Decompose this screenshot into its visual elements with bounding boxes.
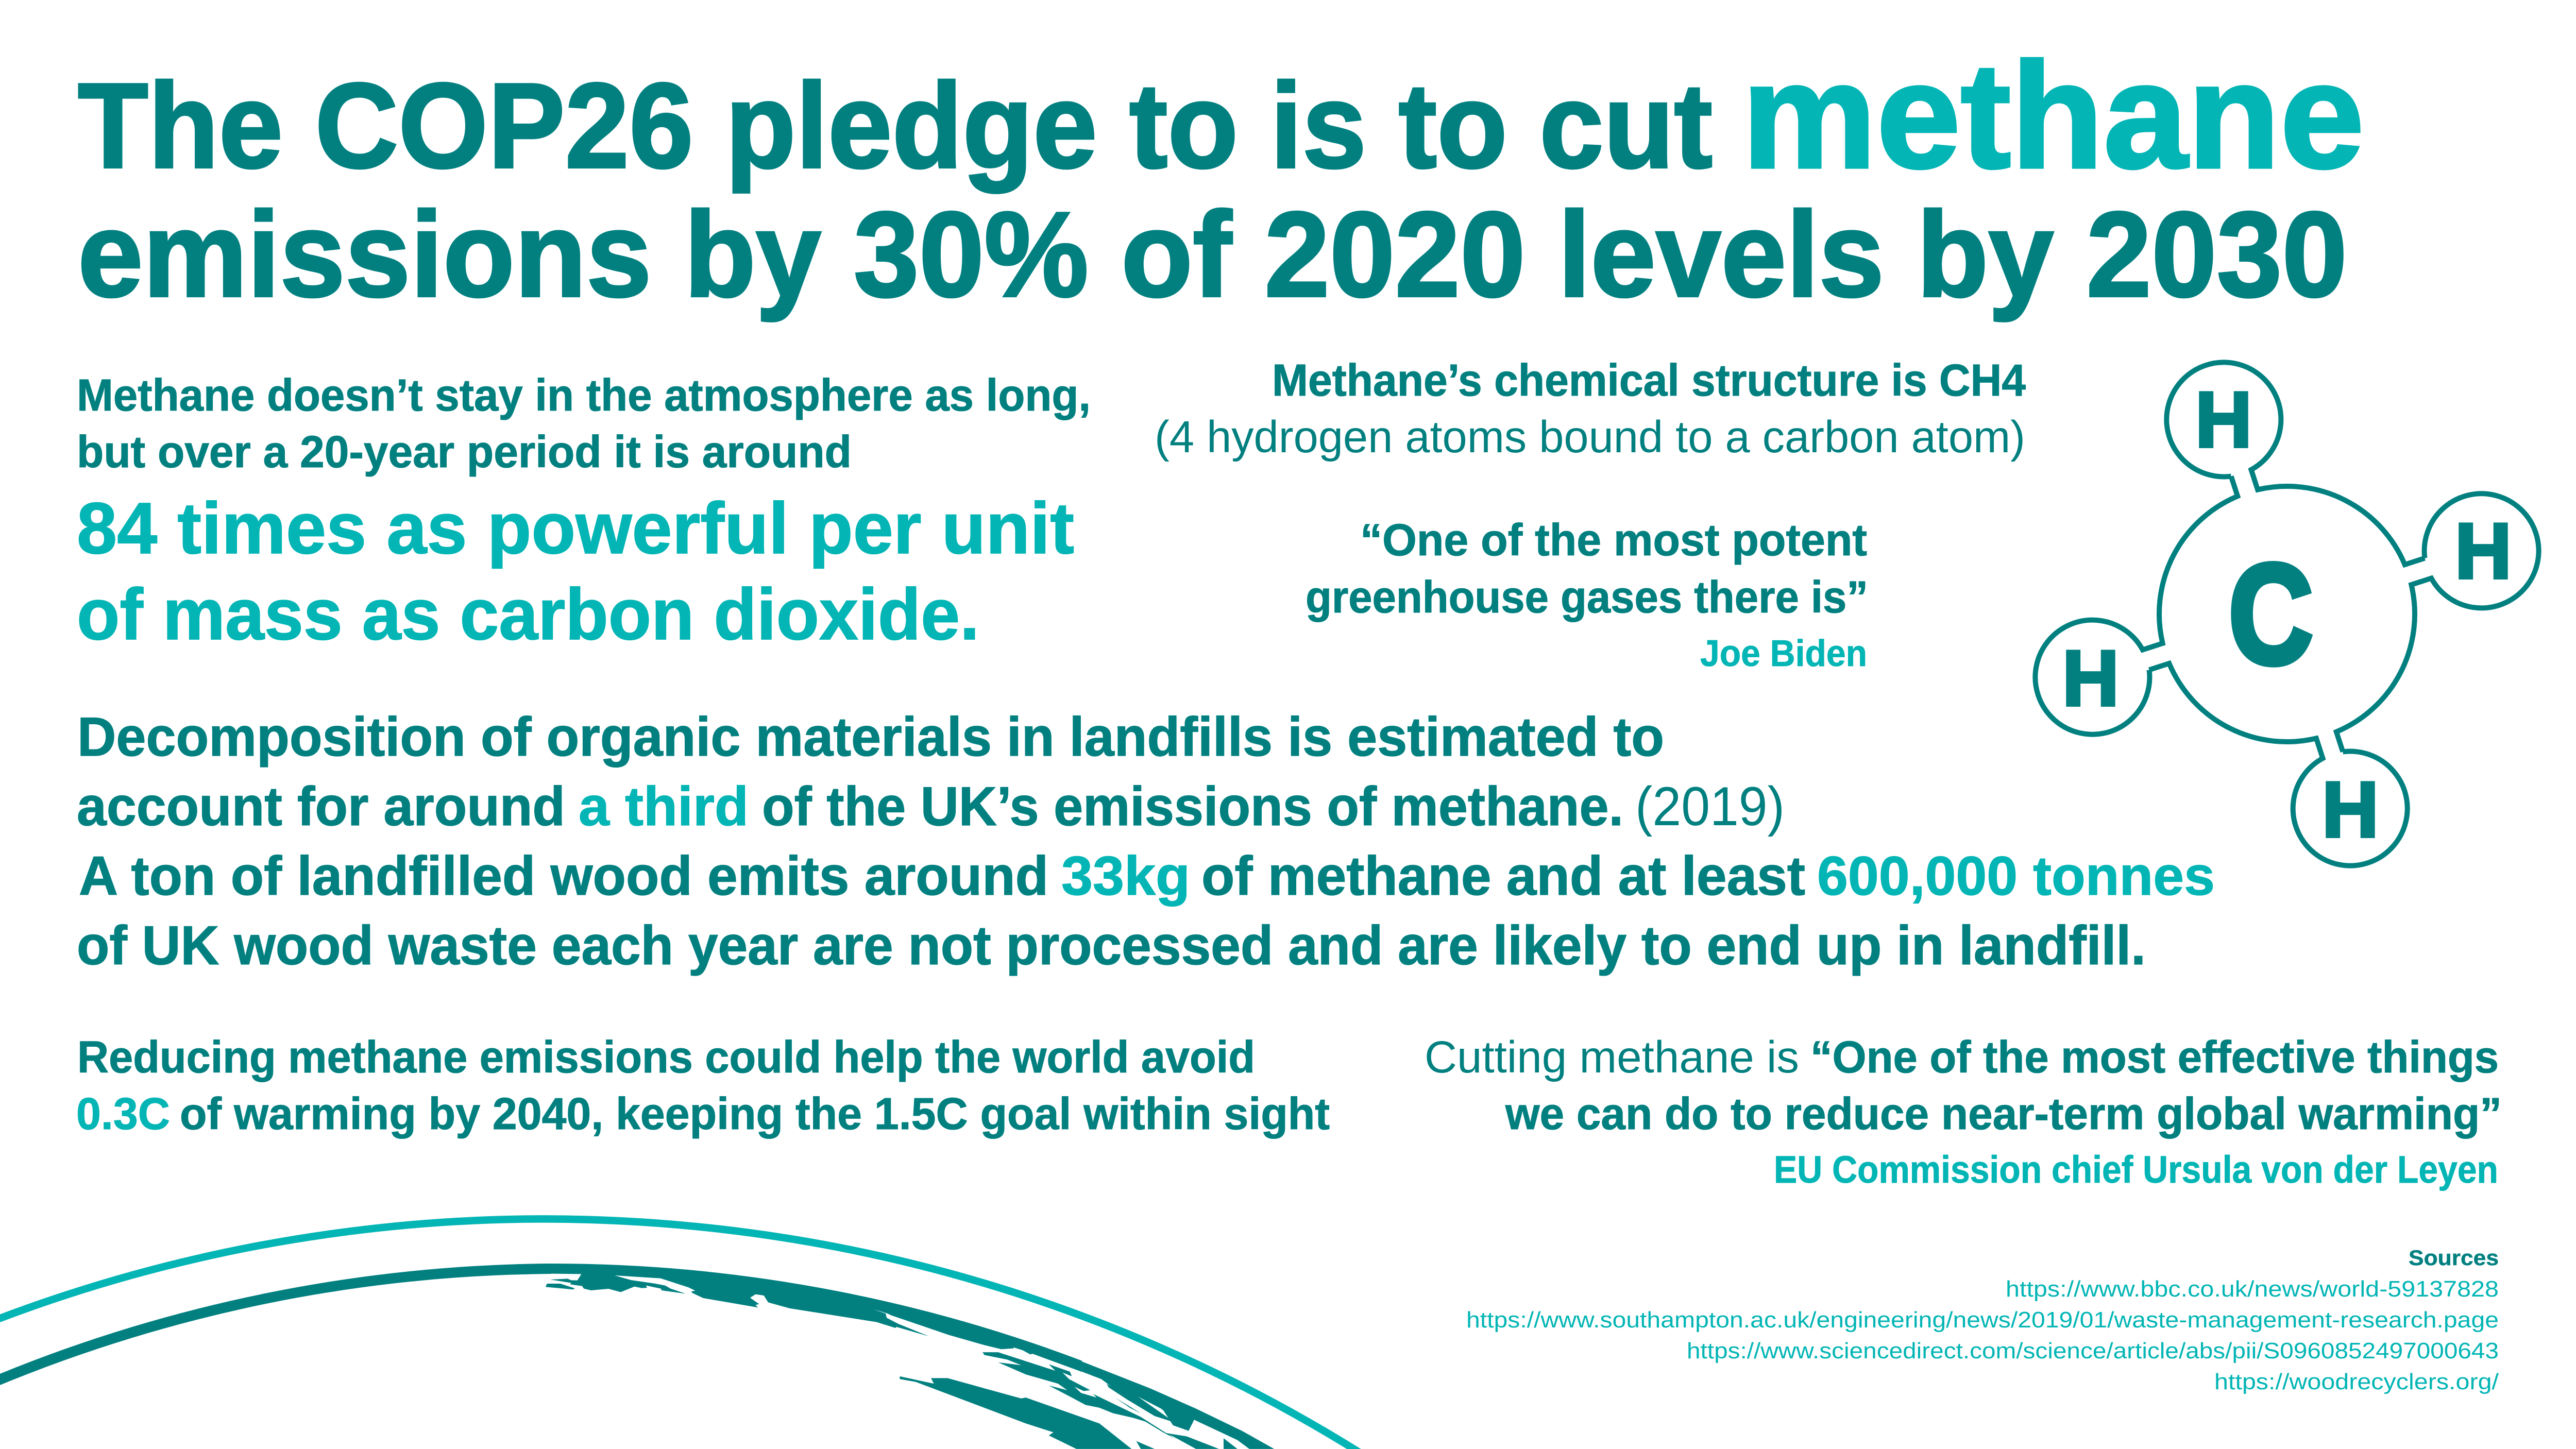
atmosphere arc [0,1219,1366,1449]
text block: methane potency: but over a 20-year period it is around [77,427,852,477]
icon: methane molecule [1992,319,2576,909]
land band: top with coastline [515,1264,1082,1372]
text block: warming avoided [76,1032,1330,1139]
sources: https://www.southampton.ac.uk/engineering/news/2019/01/waste-management-research.page [1466,1307,2499,1333]
icon: methane molecule: H [2062,635,2119,722]
text block: landfill emissions: A ton of landfilled wood emits around [79,845,1048,907]
quote: Ursula von der Leyen: we can do to reduce near-term global warming” [1505,1089,2502,1139]
quote: Joe Biden [1306,515,1868,674]
icon: methane molecule: H [2195,376,2252,464]
text block: landfill emissions: of the UK’s emissions of methane. [762,775,1623,837]
sources [1466,1246,2499,1394]
title: methane [1742,31,2364,199]
quote: Joe Biden: greenhouse gases there is” [1306,572,1868,622]
text block: methane potency: 84 times as powerful per unit [77,487,1074,569]
globe illustration [0,1219,1366,1449]
text block: chemical structure: (4 hydrogen atoms bound to a carbon atom) [1155,412,2025,462]
sources: https://www.bbc.co.uk/news/world-59137828 [2006,1276,2499,1302]
quote: Ursula von der Leyen: EU Commission chief Ursula von der Leyen [1774,1148,2498,1191]
quote: Ursula von der Leyen: Cutting methane is [1425,1032,1799,1082]
quote: Ursula von der Leyen [1425,1032,2502,1191]
quote: Joe Biden: “One of the most potent [1360,515,1867,565]
title: The COP26 pledge to is to cut [78,58,1713,193]
land: lower continents and streaks [900,1352,1274,1449]
text block: methane potency [77,370,1091,655]
sources: https://www.sciencedirect.com/science/article/abs/pii/S0960852497000643 [1687,1338,2499,1363]
text block: landfill emissions [77,706,2215,976]
title: emissions by 30% of 2020 levels by 2030 [78,186,2347,322]
text block: landfill emissions: of methane and at least [1201,845,1805,907]
text block: landfill emissions: 600,000 tonnes [1817,845,2215,907]
text block: methane potency: Methane doesn’t stay in the atmosphere as long, [77,370,1091,420]
sources: Sources [2409,1246,2499,1270]
text block: warming avoided: of warming by 2040, keeping the 1.5C goal within sight [180,1089,1330,1139]
text block: methane potency: of mass as carbon dioxide. [77,573,979,655]
text block: chemical structure: Methane’s chemical structure is CH4 [1272,355,2026,405]
quote: Ursula von der Leyen: “One of the most effective things [1810,1032,2499,1082]
text block: landfill emissions: Decomposition of organic materials in landfills is estimated to [77,706,1664,768]
icon: methane molecule: H [2455,507,2512,595]
sources: https://woodrecyclers.org/ [2214,1369,2499,1394]
icon: methane molecule: H [2322,766,2379,854]
text block: landfill emissions: of UK wood waste each year are not processed and are likely to end up in landfill. [77,914,2146,976]
text block: landfill emissions: account for around [77,775,565,837]
icon: methane molecule: C [2229,535,2313,693]
quote: Joe Biden: Joe Biden [1700,633,1867,674]
land band: left [0,1264,551,1386]
title [78,31,2364,322]
text block: warming avoided: 0.3C [76,1089,170,1139]
text block: landfill emissions: a third [579,775,749,837]
text block: landfill emissions: 33kg [1061,845,1190,907]
text block: chemical structure [1155,355,2026,462]
text block: landfill emissions: (2019) [1635,775,1785,837]
text block: warming avoided: Reducing methane emissions could help the world avoid [77,1032,1255,1082]
